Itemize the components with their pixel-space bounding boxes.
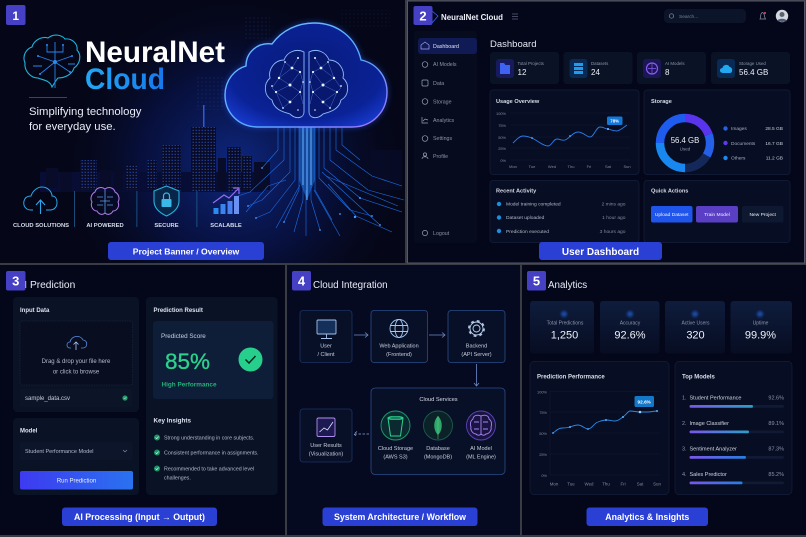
storage donut: Storage (651, 99, 672, 105)
cloud services group: (ML Engine) (466, 454, 496, 460)
usage overview chart: Usage Overview (496, 99, 540, 105)
prediction result card (146, 297, 278, 495)
key insights: Key Insights (154, 418, 191, 424)
sidebar: Settings (433, 136, 452, 142)
usage overview chart: Thu (568, 164, 574, 169)
node: user results: (Visualization) (309, 452, 343, 458)
top models list: 92.6% (768, 396, 784, 402)
cloud services group: Cloud Storage (378, 446, 413, 452)
badge 3: 3 (12, 274, 19, 288)
prediction performance chart: 0% (541, 473, 548, 478)
sidebar: Analytics (433, 118, 455, 124)
top models list: Top Models (682, 374, 716, 380)
panel: AI prediction (0, 265, 285, 535)
sidebar: Dashboard (433, 44, 459, 50)
sidebar: Storage (433, 100, 452, 106)
caption pill (322, 508, 478, 526)
top models list: Sentiment Analyzer (690, 446, 737, 452)
top models list: Sales Predictor (690, 472, 727, 478)
prediction performance chart: 100% (537, 390, 548, 394)
quick actions: New Project (750, 212, 777, 218)
caption pill (539, 242, 662, 260)
skyline (40, 105, 402, 192)
sidebar: Logout (433, 231, 450, 237)
prediction performance chart: 25% (539, 452, 548, 457)
recent activity: 3 hours ago (600, 229, 626, 235)
header (432, 9, 788, 23)
node: web application (371, 310, 428, 362)
key insights: Consistent performance in assignments. (164, 450, 259, 456)
top models list: 85.2% (768, 472, 784, 478)
usage overview chart: Sat (605, 164, 612, 169)
storage donut: 16.7 GB (765, 141, 783, 147)
caption pill (586, 508, 708, 526)
top models list: Image Classifier (690, 421, 729, 427)
cloud services group: Cloud Services (419, 397, 458, 403)
prediction result card: 85% (165, 349, 210, 374)
cloud services group: AI Model (470, 446, 492, 452)
usage overview chart: 25% (498, 146, 507, 151)
sidebar (414, 31, 477, 243)
stat cards: 8 (665, 68, 670, 77)
badge 1: 1 (12, 9, 19, 23)
usage overview chart: Sun (623, 164, 631, 169)
prediction performance chart (530, 362, 669, 494)
sidebar: Data (433, 81, 444, 87)
feature icon: cloud solutions (13, 187, 69, 229)
KPI cards: 92.6% (614, 330, 646, 342)
top models list: 2. (682, 421, 687, 427)
recent activity: Dataset uploaded (506, 215, 545, 221)
node: web application: (Frontend) (386, 352, 412, 358)
storage donut: Used (680, 146, 691, 152)
feature icon: cloud solutions: CLOUD SOLUTIONS (13, 223, 69, 229)
prediction performance chart: Wed (585, 482, 594, 486)
KPI cards: 1,250 (551, 330, 578, 342)
node: user results: User Results (310, 443, 342, 449)
prediction performance chart: 75% (539, 410, 548, 415)
input data card: sample_data.csv (25, 396, 70, 402)
quick actions: Train Model (704, 212, 730, 218)
usage overview chart: 0% (500, 158, 507, 163)
KPI cards: 99.9% (745, 330, 776, 342)
model card: Model (20, 428, 38, 434)
feature icon: AI powered (86, 188, 124, 229)
top models list: Student Performance (690, 396, 741, 402)
usage overview chart: 75% (498, 123, 507, 128)
badge 3 (6, 271, 26, 290)
node: web application: Web Application (379, 344, 419, 350)
node: backend: (API Server) (461, 352, 492, 358)
KPI cards: Uptime (753, 320, 769, 326)
arrow (429, 332, 445, 338)
caption pill (108, 242, 264, 260)
prediction performance chart: Tue (567, 482, 575, 486)
node: user results (300, 409, 352, 462)
badge 2 (414, 6, 432, 25)
icon: AI model (466, 411, 496, 440)
storage donut: 56.4 GB (671, 136, 699, 145)
quick actions: Upload Dataset (655, 212, 689, 218)
dashed arrow (354, 432, 369, 436)
KPI cards (530, 301, 792, 354)
key insights: Recommended to take advanced level (164, 466, 254, 472)
run prediction button: Run Prediction (57, 478, 96, 484)
input data card: or click to browse (53, 370, 100, 376)
tagline: Simplifying technology (29, 106, 142, 118)
storage donut: 11.2 GB (766, 156, 783, 162)
header: Search... (679, 14, 698, 20)
panel: cloud integration (287, 265, 520, 535)
cloud services group: (AWS S3) (383, 454, 408, 460)
logo icon: brain circuit (24, 35, 80, 88)
node: user client: / Client (317, 352, 335, 358)
icon: cloud storage (381, 411, 410, 440)
stat cards: Total Projects (518, 61, 545, 66)
panel: AI prediction: AI Prediction (18, 280, 75, 291)
KPI cards: 320 (686, 330, 705, 342)
badge 2: 2 (419, 8, 427, 24)
node: backend: Backend (466, 344, 487, 350)
top models list: 1. (682, 396, 687, 402)
heading: Cloud Integration (313, 280, 388, 291)
recent activity: 1 hour ago (602, 215, 626, 221)
node: user client (300, 310, 352, 362)
stat cards (490, 52, 790, 84)
storage donut: 28.5 GB (765, 126, 783, 132)
storage donut (644, 90, 790, 174)
recent activity (490, 180, 639, 242)
node: backend (448, 310, 505, 362)
tagline (29, 106, 142, 133)
usage overview chart: Wed (548, 164, 556, 169)
storage donut: Others (731, 156, 746, 162)
circuit traces (238, 127, 404, 236)
cloud services group: (MongoDB) (424, 454, 452, 460)
sidebar: AI Models (433, 62, 457, 68)
prediction result card: Prediction Result (154, 308, 203, 314)
title: NeuralNet (85, 36, 225, 69)
recent activity: 2 mins ago (602, 202, 626, 208)
usage overview chart: 50% (498, 135, 507, 140)
prediction performance chart: 50% (539, 431, 548, 436)
key insights: Strong understanding in core subjects. (164, 436, 254, 442)
cloud services group: Database (426, 446, 450, 452)
recent activity: Model training completed (506, 202, 561, 208)
sidebar: Profile (433, 154, 448, 160)
key insights (154, 418, 259, 482)
prediction performance chart: Thu (602, 482, 610, 486)
title: Cloud (85, 63, 165, 96)
model card: Student Performance Model (25, 449, 93, 455)
title (85, 36, 225, 96)
input data card (13, 297, 139, 412)
tagline: for everyday use. (29, 121, 116, 133)
caption pill: Analytics & Insights (605, 512, 689, 522)
stat cards: 12 (518, 68, 527, 77)
storage donut: Documents (731, 141, 756, 147)
panel: project banner (0, 0, 405, 263)
heading: Analytics (548, 280, 587, 291)
usage overview chart: Fri (587, 164, 591, 169)
badge 1 (6, 5, 26, 25)
arrow (354, 332, 368, 338)
badge 4: 4 (298, 274, 306, 288)
prediction performance chart: Mon (550, 482, 559, 486)
usage overview chart: Mon (509, 164, 517, 169)
badge 5: 5 (533, 274, 540, 288)
input data card: Input Data (20, 308, 50, 314)
prediction result card: High Performance (162, 382, 217, 388)
KPI cards: Active Users (681, 320, 710, 326)
caption pill (62, 508, 217, 526)
dashboard heading: Dashboard (490, 39, 536, 50)
header: NeuralNet Cloud (441, 12, 503, 22)
usage overview chart: 100% (496, 111, 507, 116)
stat cards: 56.4 GB (739, 68, 768, 77)
KPI cards: Accuracy (620, 320, 641, 326)
caption pill: Project Banner / Overview (133, 246, 240, 256)
usage overview chart: 78% (610, 119, 619, 124)
quick actions (644, 180, 790, 242)
usage overview chart (490, 90, 639, 174)
recent activity: Recent Activity (496, 188, 537, 194)
cloud with brain (225, 23, 387, 127)
top models list: 87.3% (768, 446, 784, 452)
top models list (675, 362, 792, 494)
feature icon: scalable: SCALABLE (210, 223, 242, 229)
badge 4 (292, 271, 311, 290)
top models list: 4. (682, 472, 687, 478)
top models list: 89.1% (768, 421, 784, 427)
prediction performance chart: Prediction Performance (537, 374, 605, 380)
cloud services group (371, 388, 505, 474)
feature icon: AI powered: AI POWERED (86, 223, 124, 229)
caption pill: User Dashboard (562, 247, 639, 258)
prediction performance chart: Sun (653, 482, 661, 486)
caption pill: System Architecture / Workflow (334, 512, 466, 522)
feature icon: secure (154, 186, 179, 229)
prediction performance chart: 92.6% (638, 400, 652, 404)
check icon (238, 348, 262, 372)
model card (13, 418, 139, 495)
badge 5 (527, 271, 546, 290)
recent activity: Prediction executed (506, 229, 549, 235)
arrow (474, 364, 479, 386)
caption pill: AI Processing (Input → Output) (74, 512, 205, 522)
icon: database (424, 411, 452, 440)
panel: analytics (522, 265, 806, 535)
panel: user dashboard (408, 1, 804, 263)
stat cards: AI Models (665, 61, 685, 66)
stat cards: Storage Used (739, 61, 766, 66)
key insights: challenges. (164, 476, 191, 482)
KPI cards: Total Predictions (547, 320, 584, 326)
prediction result card: Predicted Score (161, 333, 206, 340)
quick actions: Quick Actions (651, 188, 688, 194)
storage donut: Images (731, 126, 747, 132)
stat cards: Datasets (591, 61, 609, 66)
prediction performance chart: Fri (620, 482, 626, 486)
usage overview chart: Tue (529, 164, 536, 169)
feature icon: scalable (210, 188, 242, 229)
prediction performance chart: Sat (637, 482, 644, 486)
feature icon: secure: SECURE (154, 223, 179, 229)
stat cards: 24 (591, 68, 600, 77)
input data card: Drag & drop your file here (42, 359, 111, 365)
top models list: 3. (682, 446, 687, 452)
node: user client: User (320, 344, 332, 350)
